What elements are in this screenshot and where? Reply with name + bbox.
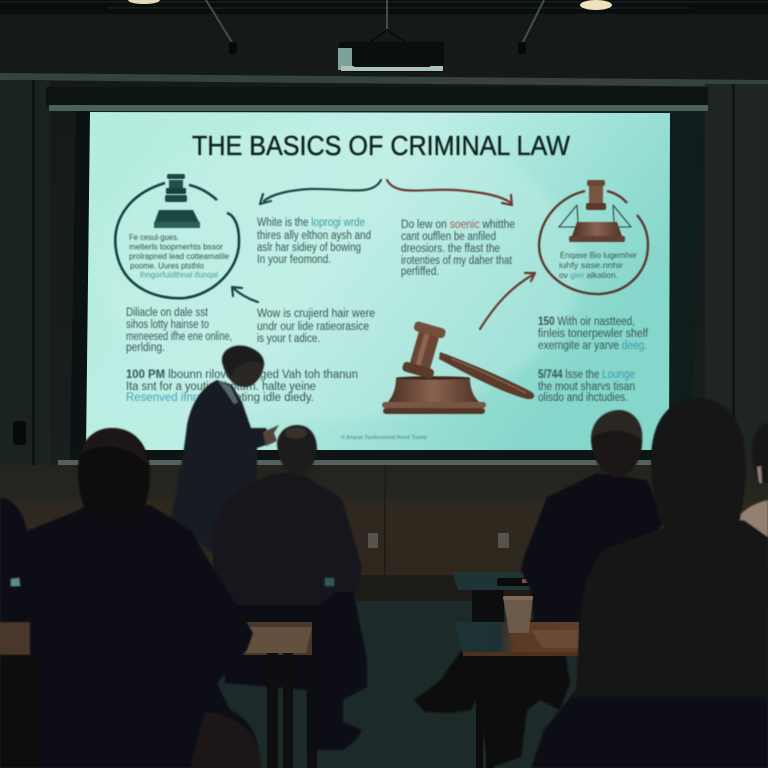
text block: left middle — [126, 307, 232, 354]
front left man head — [78, 428, 150, 515]
right man head — [591, 410, 642, 477]
center man head — [277, 425, 317, 476]
text block: center middle: undr our lide ratieorasice — [257, 321, 369, 333]
right circle text — [559, 250, 637, 280]
light patch beside center man — [325, 578, 334, 586]
text block: top middle right: Do lew on soenic whitthe — [401, 219, 515, 231]
projection screen — [86, 112, 670, 450]
projection screen frame — [46, 87, 708, 465]
wall device — [13, 421, 26, 445]
text block: lower left — [126, 369, 358, 404]
front left man hip — [190, 712, 261, 768]
text block: right 5/744 — [538, 369, 635, 404]
circle text: poome. Uures ptsthlo — [130, 262, 205, 270]
audience center man — [213, 425, 367, 750]
text block: left middle: meneesed ifhe ene online, — [126, 331, 232, 343]
text block: right 5/744: olisdo and ihctudies. — [538, 392, 628, 404]
neighbour at far left — [0, 498, 34, 622]
right circle text: Enqase Bio lugemher — [560, 250, 637, 260]
gavel head — [401, 321, 447, 379]
gavel sound block — [388, 378, 479, 402]
text block: top middle left: aslr har sidiey of bowing — [257, 242, 361, 254]
circle text: Fe cesul-gues. — [129, 233, 179, 242]
gavel handle — [439, 352, 534, 399]
desk rear right — [452, 572, 531, 622]
center man torso — [213, 473, 362, 605]
circle text: prolrapned lead cotteamatile — [129, 252, 230, 261]
arrow gavel to circle — [480, 274, 534, 329]
right circle diagram — [539, 180, 648, 294]
presenter head — [222, 346, 264, 387]
text block: top middle left — [257, 217, 371, 266]
arrow top right — [387, 180, 511, 203]
arrows on screen — [232, 180, 535, 329]
icon: gavel teal — [154, 174, 200, 228]
text block: top middle left: thires ally elthon aysh and — [257, 230, 371, 242]
text block: top middle right: perfiffed. — [401, 266, 439, 278]
arrow middle left — [233, 288, 258, 302]
desks — [0, 572, 570, 768]
circle text: melterls tooprnerhts bssor — [129, 242, 223, 252]
text block: center middle: is your t adice. — [257, 333, 320, 345]
wall socket left — [368, 533, 378, 548]
desk front left — [0, 622, 317, 768]
front left lower dark — [0, 655, 40, 768]
text block: right 150: exerngite ar yarve deeg. — [538, 340, 647, 352]
text block: left middle: Diliacle on dale sst — [126, 307, 209, 319]
scale lines — [559, 205, 631, 227]
text block: top middle right: irotenties of my daher that — [401, 255, 513, 267]
center man legs — [225, 590, 367, 750]
text block: lower left: 100 PM lbounn rilovctors aged Vah toh thanun — [126, 369, 358, 381]
paper cup — [503, 597, 533, 633]
circle text — [129, 233, 230, 280]
desk front right — [455, 596, 579, 768]
left circle diagram — [115, 174, 239, 298]
text block: top middle right — [401, 219, 515, 278]
presenter body — [170, 380, 272, 555]
lower wall panels — [0, 465, 768, 601]
wall socket right — [498, 533, 509, 548]
right man torso — [521, 473, 664, 630]
right man legs under desk — [414, 620, 570, 768]
gavel, large — [382, 321, 534, 414]
presenter — [170, 346, 279, 555]
text block: lower left: Ita snt for a youtinn hoturn. halte yeine — [126, 381, 316, 393]
screen glow — [100, 120, 580, 420]
presenter hand — [263, 425, 279, 446]
text block: lower left: Resenved ifnrast rateeting idle diedy. — [126, 392, 314, 404]
text block: right 5/744: 5/744 lsse the Lounge — [538, 369, 635, 381]
notebook — [531, 630, 579, 648]
text block: top middle right: dreosiors. the ffast the — [401, 243, 500, 255]
right circle text: ov gier alkation. — [559, 270, 618, 280]
far right man head — [651, 398, 746, 530]
far right man body — [531, 520, 768, 768]
circle text: lhngorfuldthnal ifunqal — [140, 270, 218, 280]
audience front left — [0, 428, 261, 768]
circle arc top right — [607, 191, 627, 203]
circle outline right — [539, 191, 648, 294]
neighbour far right — [752, 423, 768, 483]
audience right man — [521, 410, 664, 630]
text block: left middle: sihos lotty hainse to — [126, 319, 209, 331]
text block: right 5/744: the mout sharvs tisan — [538, 381, 635, 393]
text block: center middle — [257, 308, 375, 345]
front left man body — [20, 505, 260, 768]
ceiling lights and projector — [0, 0, 768, 72]
circle arc top — [189, 185, 217, 200]
text block: center middle: Wow is crujierd hair were — [257, 308, 375, 320]
text block: right 150: 150 With oir nastteed, — [538, 316, 635, 328]
text block: top middle left: White is the loprogi wrde — [257, 217, 365, 229]
circle outline left — [115, 183, 239, 298]
arrow top left — [264, 180, 381, 201]
right circle text: iuhfy sase.nnhir — [559, 260, 623, 270]
text block: left middle: perlding. — [126, 342, 165, 354]
audience far right man — [531, 398, 768, 768]
presenter collar — [218, 381, 238, 404]
floor — [0, 601, 768, 768]
icon: small gavel — [569, 180, 625, 242]
title: THE BASICS OF CRIMINAL LAW — [192, 130, 571, 161]
text block: top middle left: In your feomond. — [257, 254, 331, 266]
text block: right 150 — [538, 316, 649, 352]
text block: right 150: finleis tonerpewler shelf — [538, 328, 649, 340]
text block: top middle right: cant oufflen be anfiled — [401, 231, 496, 243]
footer note on screen: © Ampas Twofessional Reed Toums — [341, 434, 428, 441]
